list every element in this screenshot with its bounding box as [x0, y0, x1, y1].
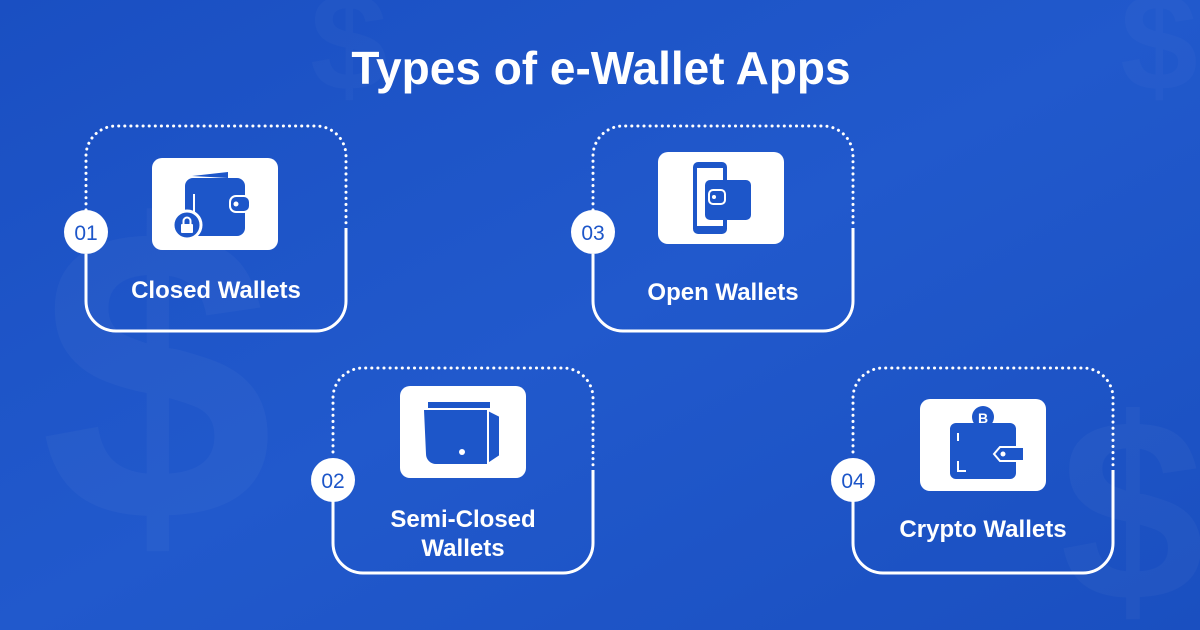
icon: open wallet: [400, 386, 526, 478]
label: Crypto Wallets: [899, 516, 1067, 543]
text: $: [40, 141, 274, 610]
number badge 03: [571, 210, 615, 254]
title: Types of e-Wallet Apps: [351, 42, 851, 94]
number badge 02: [311, 458, 355, 502]
number badge 04: [831, 458, 875, 502]
number badge 04: 04: [841, 470, 865, 493]
icon: wallet with lock: [152, 158, 278, 250]
label: Open Wallets: [647, 279, 799, 306]
label: Closed Wallets: [131, 277, 301, 304]
panel: semi-closed wallets: Wallets: [421, 535, 505, 562]
icon: phone with wallet: [658, 152, 784, 244]
panel: semi-closed wallets: [311, 368, 593, 573]
label: Semi-Closed: [390, 506, 536, 533]
number badge 03: 03: [581, 222, 605, 245]
panel: closed wallets: [64, 126, 346, 331]
panel: crypto wallets: [831, 368, 1113, 573]
number badge 02: 02: [321, 470, 345, 493]
panel: open wallets: [571, 126, 853, 331]
number badge 01: 01: [74, 222, 98, 245]
icon: crypto wallet: B: [978, 410, 988, 426]
number badge 01: [64, 210, 108, 254]
icon: crypto wallet: [920, 399, 1046, 491]
